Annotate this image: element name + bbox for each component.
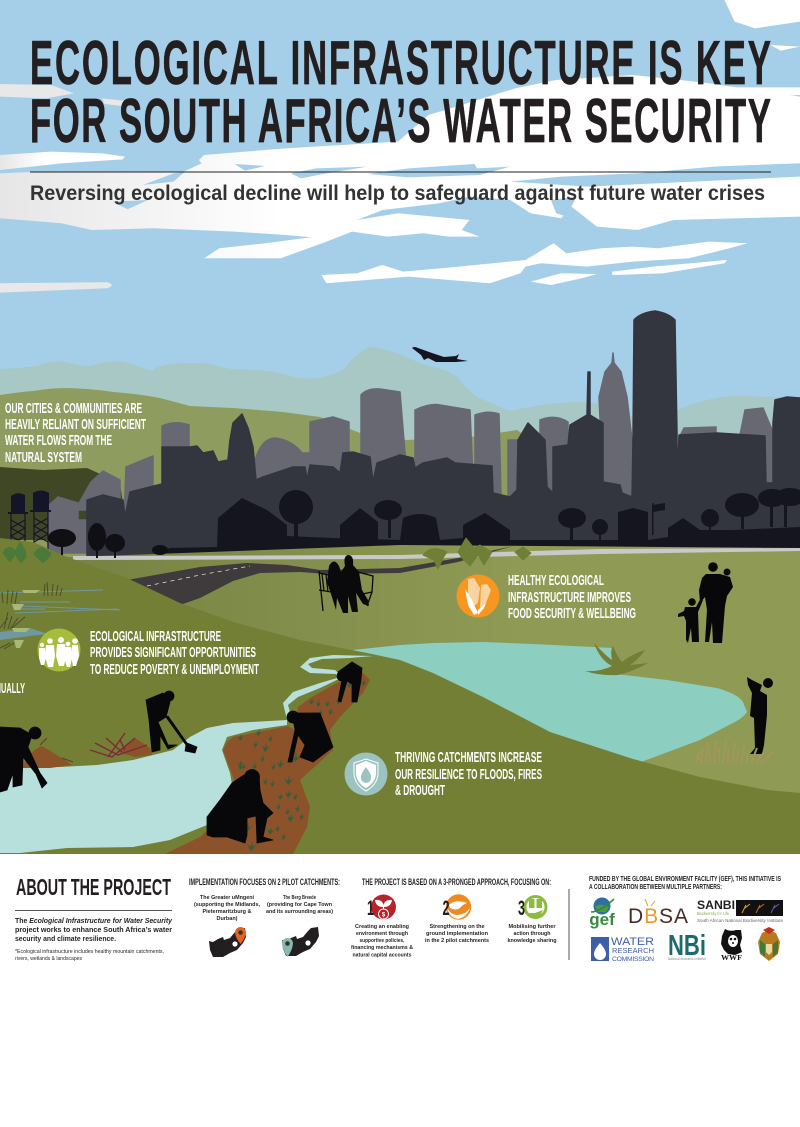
skyline: rear grey buildings [49,353,773,553]
three-pronged approach heading: THE PROJECT IS BASED ON A 3-PRONGED APPROACH, FOCUSING ON: [362,877,551,888]
callout: food security: HEALTHY ECOLOGICAL [508,573,604,589]
seedlings [238,679,367,851]
approach 1: supportive policies, [360,938,405,944]
family [678,562,733,643]
river [0,720,287,853]
approach 1: environment through [356,931,409,937]
approach 2: ground implementation [426,931,489,937]
green hills [0,388,560,560]
about the project: The Ecological Infrastructure for Water Security [15,916,173,925]
stream [283,655,373,722]
road [127,546,513,605]
logo: SANBI: South African National Biodiversity Institute [697,918,783,924]
pilot catchments: The Berg Breede [283,895,316,901]
approach 3: knowledge sharing [508,938,557,944]
approach 2: 2 [442,897,450,920]
logo: coat of arms [758,927,780,961]
callout: resilience: THRIVING CATCHMENTS INCREASE [395,750,542,766]
pilot catchments: Durban) [216,916,238,922]
callout: resilience: OUR RESILIENCE TO FLOODS, FIRES [395,767,542,783]
divider [568,889,570,960]
skyline: dark houses and trees [150,488,800,557]
funders heading [589,874,781,891]
callout: food security: FOOD SECURITY & WELLBEING [508,606,636,622]
meadow [0,545,800,860]
skyline: front dark buildings [87,311,800,556]
icon: shield and water drop [344,752,388,796]
logo: WWF [721,929,742,962]
logo: GEF [589,898,615,929]
lake [353,642,747,765]
approach 2 [425,894,489,944]
panel: sky background [0,0,800,860]
callout: cities: HEAVILY RELIANT ON SUFFICIENT [5,417,146,433]
approach 2: in the 2 pilot catchments [425,938,489,944]
about the project: project works to enhance South Africa’s water [15,925,172,934]
pilot catchments: The Greater uMngeni [200,895,254,901]
title: FOR SOUTH AFRICA’S WATER SECURITY [30,86,771,156]
logo: Water Research Commission: RESEARCH [612,946,654,955]
grass tufts [585,643,774,763]
far mountains [0,347,800,520]
approach 3 [508,896,557,944]
logo: Water Research Commission: WATER [611,936,654,948]
foreground hill [0,538,800,854]
pilot catchments: and its surrounding areas) [266,909,333,915]
approach 3: 3 [518,897,525,920]
callout: food security [508,573,636,622]
approach 3: Mobilising further [508,924,556,930]
child with binoculars [747,677,773,754]
approach 2: Strengthening on the [430,924,484,930]
callout: cities: NATURAL SYSTEM [5,450,82,466]
logo: Water Research Commission: COMMISSION [612,956,654,963]
brush pile [22,733,152,768]
title: ECOLOGICAL INFRASTRUCTURE IS KEY [30,28,771,98]
soil bank [165,672,370,854]
pilot catchments: IMPLEMENTATION FOCUSES ON 2 PILOT CATCHMENTS: [189,877,340,888]
callout: resilience: & DROUGHT [395,783,445,799]
logo: Water Research Commission [591,936,654,963]
approach 1: natural capital accounts [352,952,412,958]
pilot catchments: (providing for Cape Town [267,902,333,908]
logo: SANBI: Biodiversity for Life [697,911,729,916]
pale path [73,548,800,560]
callout: opportunities: ECOLOGICAL INFRASTRUCTURE [90,629,221,645]
workers [0,662,362,843]
logo: NBI: National Business Initiative [668,957,706,961]
callout: cities [5,401,146,466]
callout: opportunities: TO REDUCE POVERTY & UNEMPLOYMENT [90,662,259,678]
logo: NBI: NBi [668,930,706,962]
pilot catchments [189,877,340,922]
icon: people [38,628,80,672]
approach 3: action through [514,931,551,937]
pilot catchments: Pietermaritzburg & [202,909,252,915]
approach 1: 1 [367,897,374,920]
shrubs [3,523,531,569]
map: Berg Breede [282,927,319,957]
airplane [412,347,468,362]
pilot catchments: (supporting the Midlands, [194,902,260,908]
panel: footer background [0,854,800,1127]
callout: food security: INFRASTRUCTURE IMPROVES [508,590,631,606]
about the project: rivers, wetlands & landscapes [15,956,82,962]
approach 1: $ [382,912,386,918]
icon: maize [456,574,500,618]
logo: SANBI [697,898,783,924]
about the project: ABOUT THE PROJECT [16,874,171,900]
subtitle: Reversing ecological decline will help to safeguard against future water crises [30,182,765,205]
wetland streams and reeds [0,582,120,649]
callout: cities: WATER FLOWS FROM THE [5,433,112,449]
callout: opportunities [90,629,259,678]
funders heading: A COLLABORATION BETWEEN MULTIPLE PARTNERS: [589,882,722,891]
about the project [15,874,173,962]
logo: DBSA: DBSA [628,905,688,928]
callout: opportunities: PROVIDES SIGNIFICANT OPPORTUNITIES [90,645,256,661]
logo: WWF: WWF [721,954,742,962]
clouds [0,0,800,293]
map: uMngeni [209,927,246,957]
water towers [8,490,51,550]
logo: SANBI: SANBI [697,898,735,912]
about the project: *Ecological infrastructure includes healthy mountain catchments, [15,949,164,955]
approach 1: Creating an enabling [355,924,410,930]
callout: cities: OUR CITIES & COMMUNITIES ARE [5,401,142,417]
logo: GEF: gef [589,910,615,929]
approach 1 [351,894,413,958]
title [30,28,771,156]
about the project: security and climate resilience. [15,934,116,943]
callout: resilience [395,750,542,799]
approach 1: financing mechanisms & [351,945,413,951]
couple on bench [319,555,373,613]
